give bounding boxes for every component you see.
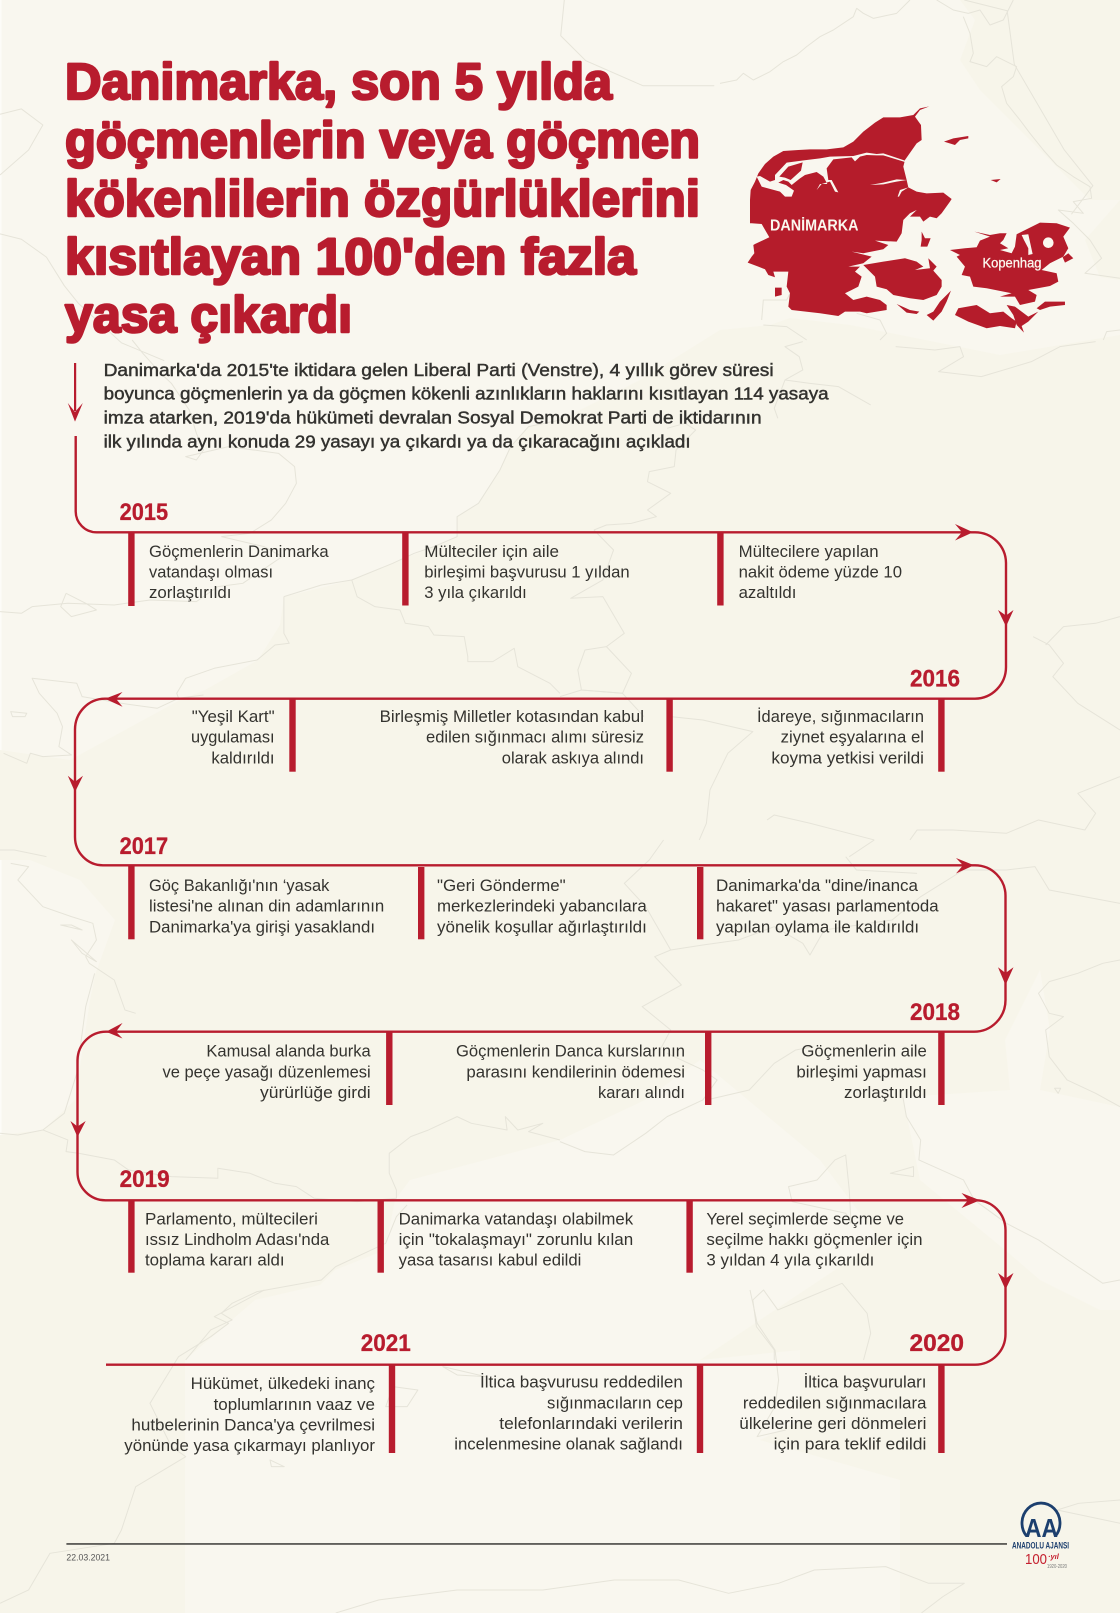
coast lines traced in crop coordinates xyxy=(720,0,1120,340)
event: 2017 first: Göç Bakanlığı'nın ‘yasak xyxy=(149,877,330,895)
event: 2015 second: 3 yıla çıkarıldı xyxy=(424,584,527,602)
event: 2015 second: birleşimi başvurusu 1 yıldan xyxy=(424,564,630,582)
arrow: 2017 down xyxy=(998,967,1014,985)
intro arrow xyxy=(68,363,83,422)
intro paragraph: ilk yılında aynı konuda 29 yasayı ya çıkardı ya da çıkaracağını açıkladı xyxy=(104,432,691,452)
event: 2016 right: İdareye, sığınmacıların xyxy=(757,707,924,726)
event: 2021 middle: incelenmesine olanak sağlandı xyxy=(454,1436,683,1454)
event: 2016 left: kaldırıldı xyxy=(211,749,275,767)
event: 2018 right: birleşimi yapması xyxy=(796,1063,927,1081)
arrow: 2017 right xyxy=(956,858,974,874)
event: 2018 left xyxy=(162,1031,392,1105)
event: 2019 third xyxy=(686,1200,922,1273)
panel: 2018 xyxy=(162,999,960,1105)
event: 2016 middle xyxy=(380,698,673,772)
event: 2019 second xyxy=(378,1200,634,1273)
year: 2016: 2016 xyxy=(910,666,960,693)
event: 2017 third xyxy=(697,867,939,939)
arrow: 2019 down xyxy=(998,1273,1014,1290)
event: 2021 middle: telefonlarındaki verilerin xyxy=(499,1415,683,1433)
event: 2021 left: hutbelerinin Danca'ya çevrilmesi xyxy=(131,1416,375,1434)
footer rule xyxy=(66,1543,1007,1545)
title: kökenlilerin özgürlüklerini xyxy=(65,170,700,227)
event: 2019 third: seçilme hakkı göçmenler için xyxy=(706,1231,922,1249)
event: 2019 first: Parlamento, mültecileri xyxy=(145,1210,318,1228)
event: 2021 left: yönünde yasa çıkarmayı planlıyor xyxy=(124,1437,376,1455)
event: 2017 second xyxy=(418,867,647,939)
title: Danimarka, son 5 yılda xyxy=(65,53,613,110)
event: 2017 second: merkezlerindeki yabancılara xyxy=(437,898,647,916)
title xyxy=(65,53,700,343)
event: 2015 third: azaltıldı xyxy=(739,584,796,602)
intro paragraph: Danimarka'da 2015'te iktidara gelen Liberal Parti (Venstre), 4 yıllık görev süresi xyxy=(104,360,774,380)
event: 2015 third: nakit ödeme yüzde 10 xyxy=(739,564,902,582)
event: 2021 middle: İltica başvurusu reddedilen xyxy=(480,1373,683,1392)
logo: Anadolu Ajansı: 100 xyxy=(1025,1551,1047,1568)
event: 2018 middle: parasını kendilerinin ödemesi xyxy=(466,1063,685,1081)
event: 2020 xyxy=(739,1364,945,1454)
event: 2018 right: Göçmenlerin aile xyxy=(801,1043,927,1061)
event: 2017 first: listesi'ne alınan din adamlarının xyxy=(149,898,384,916)
panel: 2015 xyxy=(120,499,902,606)
timeline path with arrows xyxy=(68,436,1014,1365)
event: 2016 right xyxy=(757,698,945,772)
event: 2019 first xyxy=(128,1200,329,1273)
event: 2019 second: yasa tasarısı kabul edildi xyxy=(399,1252,581,1270)
event: 2020: için para teklif edildi xyxy=(774,1436,926,1454)
arrow: 2015 down xyxy=(998,610,1014,626)
event: 2015 third: Mültecilere yapılan xyxy=(739,543,879,561)
event: 2018 left: ve peçe yasağı düzenlemesi xyxy=(162,1063,371,1081)
event: 2015 second: Mülteciler için aile xyxy=(424,543,559,561)
event: 2015 first: Göçmenlerin Danimarka xyxy=(149,543,329,561)
year: 2019: 2019 xyxy=(120,1166,170,1193)
arrow: 2016 down xyxy=(68,776,83,792)
event: 2016 left xyxy=(191,698,296,772)
year: 2017: 2017 xyxy=(120,833,168,860)
event: 2021 left xyxy=(124,1364,395,1455)
event: 2018 middle xyxy=(456,1031,711,1105)
arrow: 2019 right xyxy=(962,1193,980,1208)
event: 2017 third: hakaret" yasası parlamentoda xyxy=(716,898,939,916)
event: 2018 middle: Göçmenlerin Danca kurslarının xyxy=(456,1043,685,1061)
event: 2015 first: zorlaştırıldı xyxy=(149,584,231,602)
panel: 2016 xyxy=(191,666,960,772)
panel: 2019 xyxy=(120,1166,923,1273)
intro paragraph xyxy=(104,360,829,452)
intro paragraph: boyunca göçmenlerin ya da göçmen kökenli azınlıkların haklarını kısıtlayan 114 yasaya xyxy=(104,384,829,404)
event: 2021 middle xyxy=(454,1364,703,1454)
arrow: 2015 right xyxy=(955,524,973,540)
event: 2018 right xyxy=(796,1031,945,1105)
event: 2019 second: için "tokalaşmayı" zorunlu kılan xyxy=(399,1231,633,1249)
panel: 2021 xyxy=(124,1330,703,1455)
event: 2016 middle: edilen sığınmacı alımı süresiz xyxy=(426,729,644,747)
event: 2015 third xyxy=(717,532,902,606)
event: 2018 left: yürürlüğe girdi xyxy=(260,1084,371,1102)
event: 2017 first: Danimarka'ya girişi yasaklandı xyxy=(149,918,375,936)
event: 2021 left: Hükümet, ülkedeki inanç xyxy=(191,1375,375,1393)
event: 2019 first: ıssız Lindholm Adası'nda xyxy=(145,1231,329,1249)
intro paragraph: imza atarken, 2019'da hükümeti devralan Sosyal Demokrat Parti de iktidarının xyxy=(104,408,762,428)
map of Denmark xyxy=(748,106,1073,333)
event: 2017 third: Danimarka'da "dine/inanca xyxy=(716,877,918,895)
event: 2016 middle: Birleşmiş Milletler kotasından kabul xyxy=(380,708,644,726)
event: 2016 right: koyma yetkisi verildi xyxy=(771,749,924,767)
logo: Anadolu Ajansı: ANADOLU AJANSI xyxy=(1012,1540,1069,1550)
event: 2020: ülkelerine geri dönmeleri xyxy=(739,1415,926,1433)
panel: 2017 xyxy=(120,833,939,939)
arrow: 2018 left xyxy=(106,1023,122,1038)
event: 2015 first xyxy=(128,532,329,606)
event: 2019 third: 3 yıldan 4 yıla çıkarıldı xyxy=(706,1252,874,1270)
event: 2017 third: yapılan oylama ile kaldırıldı xyxy=(716,918,919,936)
event: 2016 right: ziynet eşyalarına el xyxy=(781,729,924,747)
year: 2020: 2020 xyxy=(910,1330,964,1357)
title: göçmenlerin veya göçmen xyxy=(65,112,700,168)
event: 2019 third: Yerel seçimlerde seçme ve xyxy=(706,1210,904,1228)
event: 2021 left: toplumlarının vaaz ve xyxy=(214,1396,375,1414)
event: 2020: reddedilen sığınmacılara xyxy=(743,1394,926,1412)
event: 2015 second xyxy=(402,532,630,606)
event: 2016 left: "Yeşil Kart" xyxy=(192,708,275,726)
logo: Anadolu Ajansı: 1920-2020 xyxy=(1047,1564,1067,1570)
label: DANİMARKA: DANİMARKA xyxy=(770,218,858,235)
event: 2018 middle: kararı alındı xyxy=(598,1084,685,1102)
event: 2019 first: toplama kararı aldı xyxy=(145,1252,285,1270)
event: 2021 middle: sığınmacıların cep xyxy=(547,1394,683,1412)
year: 2021: 2021 xyxy=(361,1330,411,1357)
title: yasa çıkardı xyxy=(65,286,352,343)
event: 2018 right: zorlaştırıldı xyxy=(844,1084,927,1102)
event: 2017 second: yönelik koşullar ağırlaştırıldı xyxy=(437,918,647,936)
event: 2016 left: uygulaması xyxy=(191,729,275,747)
panel: 2020 xyxy=(739,1330,964,1454)
year: 2015: 2015 xyxy=(120,499,168,526)
logo: Anadolu Ajansı: AA xyxy=(1025,1513,1058,1543)
event: 2018 left: Kamusal alanda burka xyxy=(206,1043,371,1061)
date: 22.03.2021 xyxy=(66,1553,110,1564)
icon: capital dot xyxy=(1043,237,1054,248)
label: Kopenhag: Kopenhag xyxy=(982,256,1042,271)
logo: Anadolu Ajansı: ·yıl xyxy=(1048,1552,1060,1561)
event: 2017 first xyxy=(128,865,384,939)
logo: Anadolu Ajansı xyxy=(1012,1503,1069,1570)
event: 2016 middle: olarak askıya alındı xyxy=(502,749,644,767)
year: 2018: 2018 xyxy=(910,999,960,1026)
event: 2015 first: vatandaşı olması xyxy=(149,564,273,582)
event: 2020: İltica başvuruları xyxy=(804,1373,926,1392)
event: 2019 second: Danimarka vatandaşı olabilmek xyxy=(399,1210,634,1228)
arrow: 2016 left xyxy=(105,692,122,707)
title: kısıtlayan 100'den fazla xyxy=(65,228,637,285)
event: 2017 second: "Geri Gönderme" xyxy=(437,877,566,895)
arrow: 2018 down xyxy=(70,1121,86,1137)
